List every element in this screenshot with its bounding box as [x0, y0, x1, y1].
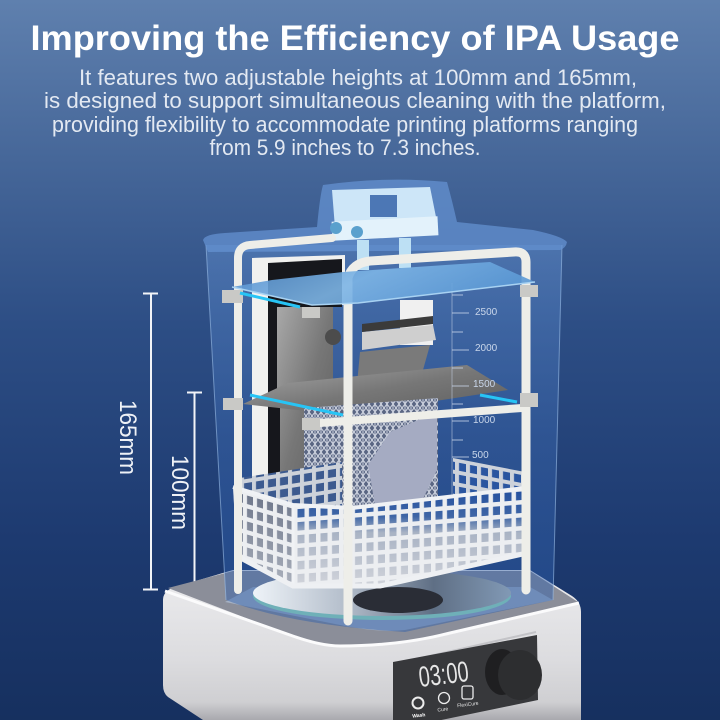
washing machine base: [163, 570, 581, 720]
back mounting plate and z-axis column: [252, 255, 345, 520]
rotating impeller disc: [253, 570, 511, 620]
scale markings: 500: [472, 450, 489, 461]
control knob: [485, 649, 542, 700]
printed model with supports: [304, 398, 438, 520]
steel build plate (lower, 100mm): [243, 365, 508, 415]
upper glass platform (165mm): [232, 262, 535, 307]
dimension: 100mm: [166, 392, 202, 589]
control panel: [393, 635, 538, 720]
mode icons and labels: Wash: [412, 712, 426, 720]
scale markings: 1000: [473, 415, 496, 426]
print head and carriage: [325, 300, 436, 410]
dimension: 100mm: 100mm: [166, 455, 193, 530]
timer display: 03:00: [417, 656, 470, 694]
mode icons and labels: FlexiCure: [457, 701, 479, 709]
description text: [44, 65, 666, 160]
scale markings: 2000: [475, 343, 498, 354]
scale markings: 1500: [473, 379, 496, 390]
mode icons and labels: [412, 686, 479, 720]
tank lid with dome: [203, 180, 567, 270]
transparent tank: [206, 245, 562, 632]
title: Improving the Efficiency of IPA Usage: [30, 19, 680, 58]
mode icons and labels: Cure: [437, 706, 449, 714]
description text: It features two adjustable heights at 100mm and 165mm,: [79, 65, 637, 90]
dimension: 165mm: 165mm: [114, 400, 141, 475]
dimension: 165mm: [114, 293, 158, 590]
wash basket: [233, 458, 527, 587]
description text: from 5.9 inches to 7.3 inches.: [210, 135, 480, 160]
scale markings: [452, 283, 498, 500]
description text: providing flexibility to accommodate printing platforms ranging: [52, 112, 638, 137]
description text: is designed to support simultaneous cleaning with the platform,: [44, 88, 666, 113]
white rack frame: [238, 238, 526, 621]
rack brackets: [222, 285, 538, 430]
scale markings: 2500: [475, 307, 498, 318]
lower platform blue edge: [250, 395, 517, 415]
